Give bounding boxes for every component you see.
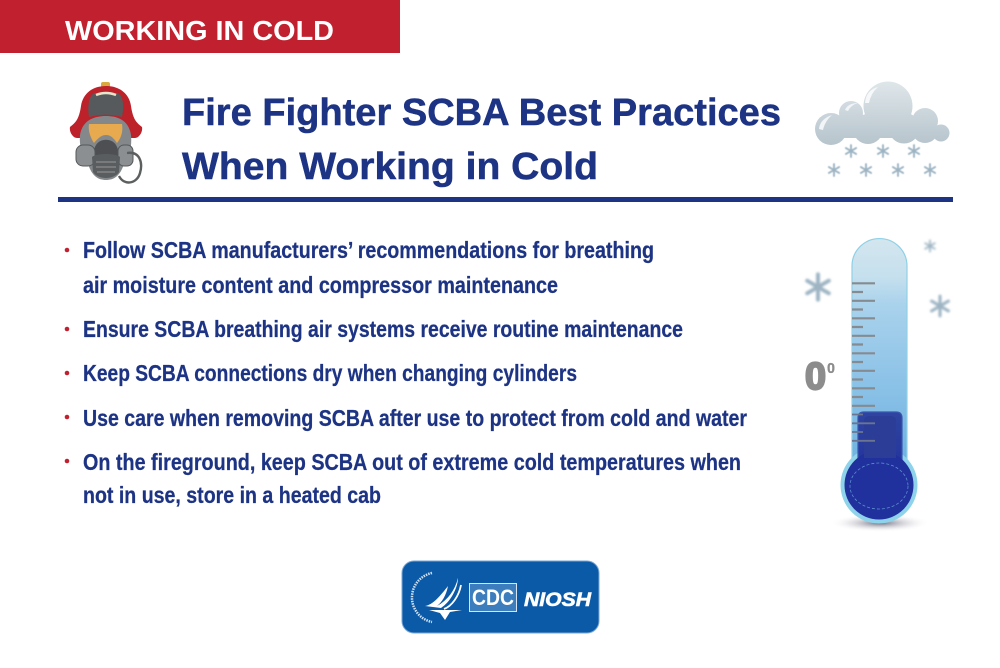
bullet 1: Follow SCBA manufacturers’ recommendations for breathing [83,237,654,263]
bullet 5: not in use, store in a heated cab [83,482,381,508]
bullet 2: Ensure SCBA breathing air systems receive routine maintenance [83,316,683,342]
CDC mark: CDC [472,585,514,610]
icon: thermometer [830,239,930,532]
header banner: WORKING IN COLD [65,15,334,46]
HHS eagle seal [412,573,462,622]
title: Fire Fighter SCBA Best Practices [182,92,781,134]
temperature label: 0 [805,356,826,398]
bullet 1: air moisture content and compressor maintenance [83,272,558,298]
logo: HHS CDC NIOSH [402,561,599,633]
bullet 4: Use care when removing SCBA after use to protect from cold and water [83,405,747,431]
icon: snow cloud [815,82,950,176]
bullet 5 [65,449,741,508]
bullet 3: Keep SCBA connections dry when changing cylinders [83,360,577,386]
header banner [0,0,400,53]
bullet 1 [65,237,654,298]
title: When Working in Cold [182,146,598,188]
bullet 5: On the fireground, keep SCBA out of extreme cold temperatures when [83,449,741,475]
icon: loose snowflakes [807,240,948,316]
NIOSH mark: NIOSH [524,590,592,611]
icon: fire fighter helmet and mask [70,82,142,182]
temperature label: 0 [827,360,835,377]
divider rule [58,197,953,202]
bullet list [65,237,747,508]
title [182,92,781,188]
